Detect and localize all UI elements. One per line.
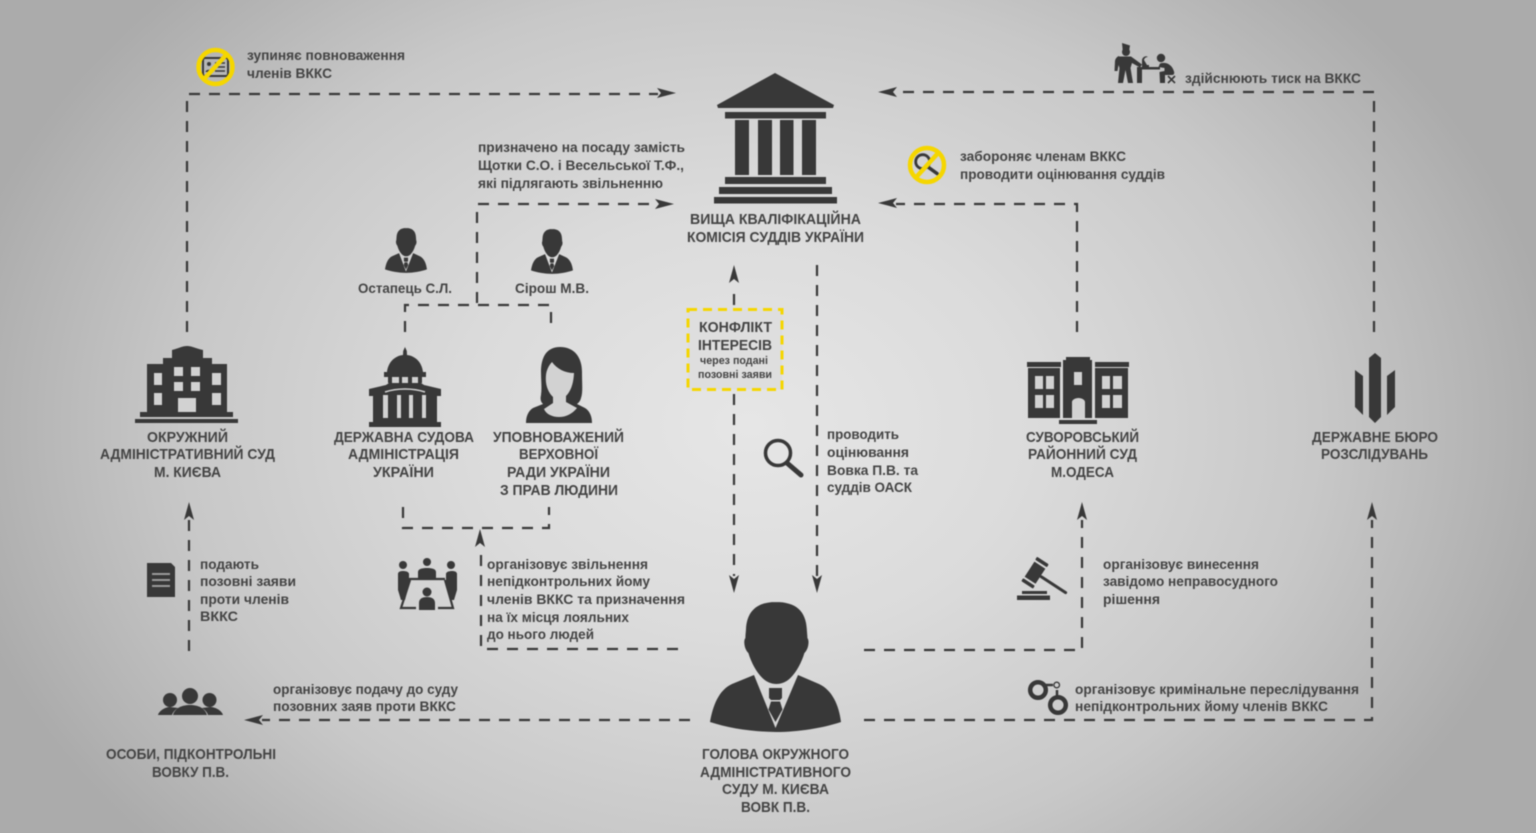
icon: forbidden magnifier [910, 148, 944, 182]
text: forbids evaluation [960, 148, 1165, 182]
icon: meeting table [398, 558, 457, 610]
label: Suvorovskyi court: СУВОРОВСЬКИЙ [1026, 428, 1139, 446]
icon: ombudsman woman [526, 347, 592, 423]
text: organises dismissal: організовує звільнення [487, 556, 648, 572]
arrow: court suspends VKKS powers [187, 88, 676, 332]
text: suspends powers: зупиняє повноваження [247, 47, 405, 63]
text: file claims [200, 556, 296, 624]
label: controlled persons: ВОВКУ П.В. [152, 764, 229, 781]
icon: forbidden ID card [198, 50, 232, 84]
text: conducts evaluation: суддів ОАСК [827, 479, 912, 495]
callout: conflict of interest: через подані [700, 355, 768, 367]
label: ombudsman: ВЕРХОВНОЇ [519, 446, 599, 463]
label: Kyiv district administrative court [100, 428, 275, 481]
icon: Kyiv district administrative court [135, 346, 238, 423]
text: conducts evaluation: проводить [827, 426, 899, 442]
arrow: head organises dismissal [475, 529, 678, 649]
label: head of court Vovk [700, 746, 851, 816]
text: file claims: проти членів [200, 591, 289, 607]
connector: Ostapets and Sirosh bracket [405, 305, 551, 332]
icon: person Sirosh [531, 229, 573, 274]
arrow: head to Suvorovskyi court [864, 502, 1087, 650]
text: organises claims: позовних заяв проти ВККС [273, 698, 456, 714]
icon: gavel [1017, 557, 1075, 606]
text: conducts evaluation: оцінювання [827, 444, 909, 460]
label: controlled persons [106, 746, 276, 781]
text: suspends powers: членів ВККС [247, 65, 332, 81]
label: ombudsman: УПОВНОВАЖЕНИЙ [493, 428, 624, 446]
arrow: head to controlled persons [244, 715, 690, 725]
label: ombudsman: З ПРАВ ЛЮДИНИ [500, 482, 618, 499]
text: appointed instead of [478, 139, 685, 191]
icon: document [147, 563, 175, 597]
label: Kyiv district administrative court: ОКРУЖНИЙ [147, 428, 228, 446]
text: organises prosecution [1075, 681, 1359, 714]
icon: controlled persons group [158, 688, 223, 715]
text: file claims: ВККС [200, 608, 238, 624]
label: ombudsman: РАДИ УКРАЇНИ [507, 464, 610, 481]
icon: interrogation [1114, 43, 1175, 83]
text: conducts evaluation [827, 426, 918, 495]
text: appointed instead of: Щотки С.О. і Весельської Т.Ф., [478, 157, 684, 173]
label: ombudsman [493, 428, 624, 499]
label: State Bureau of Investigation: ДЕРЖАВНЕ БЮРО [1312, 429, 1438, 446]
label: head of court Vovk: СУДУ М. КИЄВА [722, 781, 829, 798]
arrow: appointed members to VKKS [477, 199, 674, 303]
label: Kyiv district administrative court: М. КИЄВА [154, 464, 221, 481]
text: appointed instead of: призначено на посаду замість [478, 139, 685, 155]
label: State Judicial Administration [334, 429, 474, 481]
label: Suvorovskyi court: М.ОДЕСА [1051, 464, 1114, 481]
heading: VKKS [687, 210, 864, 246]
icon: Suvorovskyi court building [1027, 357, 1129, 424]
text: organises unjust ruling [1103, 556, 1278, 607]
icon: State Bureau of Investigation emblem [1355, 353, 1395, 423]
text: organises unjust ruling: завідомо неправосудного [1103, 573, 1278, 589]
text: organises claims: організовує подачу до суду [273, 681, 458, 697]
text: forbids evaluation: забороняє членам ВККС [960, 148, 1126, 164]
label: Kyiv district administrative court: АДМІНІСТРАТИВНИЙ СУД [100, 445, 275, 463]
heading: VKKS: КОМІСІЯ СУДДІВ УКРАЇНИ [687, 229, 864, 246]
callout: conflict of interest: ІНТЕРЕСІВ [698, 337, 772, 354]
text: organises dismissal: на їх місця лояльних [487, 609, 629, 625]
text: forbids evaluation: проводити оцінювання суддів [960, 166, 1165, 182]
heading: VKKS: ВИЩА КВАЛІФІКАЦІЙНА [690, 210, 861, 228]
connector: administration and ombudsman bracket [403, 507, 549, 528]
text: organises dismissal: непідконтрольних йому [487, 573, 650, 589]
label: controlled persons: ОСОБИ, ПІДКОНТРОЛЬНІ [106, 746, 276, 763]
text: exert pressure: здійснюють тиск на ВККС [1185, 70, 1361, 86]
text: appointed instead of: які підлягають звільненню [478, 175, 663, 191]
text: conducts evaluation: Вовка П.В. та [827, 462, 918, 478]
arrow: DBR pressure on VKKS [878, 87, 1374, 332]
label: Sirosh: Сірош М.В. [515, 280, 589, 296]
label: State Judicial Administration: ДЕРЖАВНА СУДОВА [334, 429, 474, 446]
text: organises unjust ruling: організовує винесення [1103, 556, 1259, 572]
arrow: conflict of interest up to VKKS [729, 265, 739, 305]
label: State Bureau of Investigation [1312, 429, 1438, 463]
text: organises prosecution: організовує кримінальне переслідування [1075, 681, 1359, 697]
arrow: claims filed to court [184, 502, 194, 651]
arrow: Suvorovskyi court to VKKS [878, 198, 1077, 332]
callout: conflict of interest: позовні заяви [698, 369, 772, 381]
label: Suvorovskyi court [1026, 428, 1139, 481]
callout: conflict of interest [688, 310, 782, 390]
arrow: head to DBR [864, 502, 1377, 720]
icon: head of court Vovk [710, 602, 841, 732]
text: file claims: позовні заяви [200, 573, 296, 589]
icon: magnifier [766, 440, 801, 475]
icon: temple of VKKS [714, 73, 837, 204]
text: organises unjust ruling: рішення [1103, 591, 1160, 607]
label: State Judicial Administration: УКРАЇНИ [373, 464, 434, 481]
icon: State Judicial Administration [369, 347, 441, 427]
label: Suvorovskyi court: РАЙОННИЙ СУД [1028, 445, 1137, 463]
label: head of court Vovk: ГОЛОВА ОКРУЖНОГО [702, 746, 849, 763]
arrow: VKKS evaluates head of court [812, 265, 822, 593]
arrow: conflict of interest down to head [729, 394, 739, 593]
text: file claims: подають [200, 556, 259, 572]
text: organises prosecution: непідконтрольних йому членів ВККС [1075, 698, 1328, 714]
label: State Judicial Administration: АДМІНІСТРАЦІЯ [348, 446, 459, 463]
text: organises dismissal: до нього людей [487, 626, 594, 642]
label: State Bureau of Investigation: РОЗСЛІДУВАНЬ [1321, 446, 1428, 463]
icon: handcuffs [1030, 682, 1066, 713]
text: suspends powers [247, 47, 405, 81]
label: Ostapets: Остапець С.Л. [358, 280, 452, 296]
label: head of court Vovk: АДМІНІСТРАТИВНОГО [700, 764, 851, 781]
callout: conflict of interest: КОНФЛІКТ [699, 319, 772, 336]
text: organises dismissal: членів ВККС та призначення [487, 591, 685, 607]
icon: person Ostapets [385, 228, 427, 273]
text: organises claims [273, 681, 458, 714]
text: organises dismissal [487, 556, 685, 642]
label: head of court Vovk: ВОВК П.В. [741, 799, 810, 816]
